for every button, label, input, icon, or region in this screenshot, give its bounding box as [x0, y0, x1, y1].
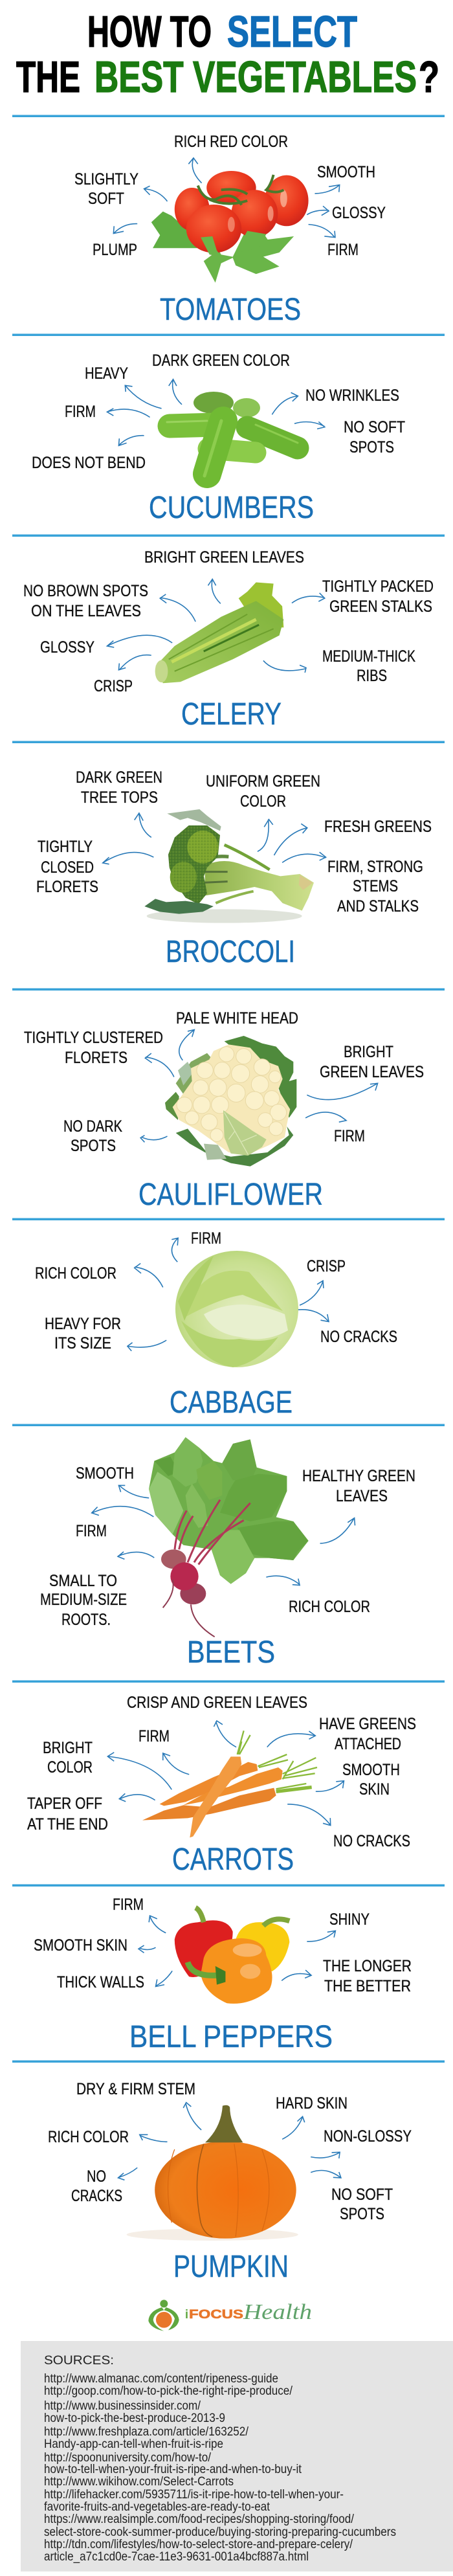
source list: http://www.wikihow.com/Select-Carrots	[44, 2475, 234, 2489]
panel: celery	[23, 548, 434, 732]
source list: favorite-fruits-and-vegetables-are-ready-to-eat	[44, 2500, 271, 2514]
label: HEALTHY GREEN	[302, 1467, 415, 1485]
arrow	[156, 1971, 172, 1986]
label: BRIGHT	[344, 1043, 393, 1061]
source list: http://www.businessinsider.com/	[44, 2399, 201, 2413]
heading: tomatoes: TOMATOES	[160, 293, 301, 327]
logo: iFocus Health: Health	[243, 2300, 312, 2324]
arrow	[292, 593, 325, 603]
arrow	[274, 823, 307, 855]
arrow	[125, 385, 162, 409]
arrow	[307, 1931, 335, 1942]
arrow	[103, 853, 153, 864]
arrow	[179, 1029, 194, 1060]
arrow	[287, 1804, 331, 1826]
illustration: cabbage	[175, 1251, 298, 1367]
arrow	[188, 158, 202, 183]
heading: carrots: CARROTS	[172, 1842, 294, 1877]
arrow	[140, 2134, 168, 2142]
label: GREEN LEAVES	[320, 1063, 424, 1081]
arrow	[92, 1506, 153, 1517]
arrow	[127, 1340, 166, 1351]
illustration: celery	[155, 583, 283, 683]
source list: http://www.almanac.com/content/ripeness-guide	[44, 2372, 278, 2386]
label: FIRM	[138, 1727, 170, 1745]
arrow	[315, 185, 340, 194]
label: SMOOTH	[76, 1464, 134, 1483]
label: DARK GREEN COLOR	[152, 352, 290, 370]
source list: select-store-cook-summer-produce/buying-storing-preparing-cucumbers	[44, 2526, 396, 2539]
arrow	[107, 635, 172, 647]
arrow	[311, 2152, 340, 2158]
heading: celery: CELERY	[181, 697, 282, 732]
source list: http://lifehacker.com/5935711/is-it-ripe-how-to-tell-when-your-	[44, 2488, 344, 2502]
label: CRACKS	[71, 2187, 122, 2205]
panel: tomatoes	[74, 133, 386, 327]
arrow	[135, 813, 151, 837]
label: CRISP	[94, 677, 133, 695]
panel: carrots	[27, 1694, 416, 1877]
label: TREE TOPS	[81, 789, 158, 807]
label: SKIN	[359, 1780, 390, 1798]
panel: cucumbers	[32, 352, 405, 525]
heading: beets: BEETS	[187, 1635, 275, 1670]
label: FIRM, STRONG	[327, 858, 423, 876]
illustration: beets	[149, 1437, 309, 1637]
arrow	[144, 186, 168, 201]
label: THE BETTER	[324, 1977, 411, 1995]
label: GREEN STALKS	[329, 598, 432, 616]
label: NO CRACKS	[333, 1832, 410, 1850]
label: DOES NOT BEND	[32, 454, 146, 472]
label: PLUMP	[93, 241, 137, 259]
label: HAVE GREENS	[319, 1715, 416, 1733]
logo: iFocus Health	[148, 2300, 312, 2331]
label: COLOR	[47, 1758, 93, 1776]
label: RICH COLOR	[48, 2128, 129, 2146]
arrow	[145, 1053, 174, 1077]
title: ?	[419, 52, 439, 102]
panel: beets	[40, 1437, 415, 1670]
source list: article_a7c1cd0e-7cae-11e3-9631-001a4bcf887a.html	[44, 2550, 309, 2564]
label: FIRM	[191, 1229, 221, 1248]
label: MEDIUM-SIZE	[40, 1591, 127, 1609]
arrow	[183, 2103, 201, 2130]
label: CRISP AND GREEN LEAVES	[127, 1694, 307, 1712]
source list: https://www.realsimple.com/food-recipes/shopping-storing/food/	[44, 2513, 355, 2526]
arrow	[118, 436, 144, 445]
panel: cauliflower	[24, 1009, 424, 1212]
arrow	[169, 379, 182, 405]
arrow	[294, 421, 325, 429]
source list: http://spoonuniversity.com/how-to/	[44, 2451, 212, 2465]
label: GLOSSY	[40, 638, 94, 656]
icon: logo figure	[148, 2300, 179, 2331]
label: HEAVY FOR	[45, 1315, 121, 1333]
logo: iFocus Health: i	[185, 2308, 188, 2322]
title: SELECT	[227, 7, 357, 56]
label: ITS SIZE	[54, 1334, 111, 1352]
arrow	[300, 1281, 324, 1305]
label: HARD SKIN	[276, 2094, 348, 2112]
source list: how-to-tell-when-your-fruit-is-ripe-and-when-to-buy-it	[44, 2463, 302, 2476]
arrow	[149, 1916, 166, 1933]
arrow	[160, 594, 195, 622]
label: THE LONGER	[323, 1957, 412, 1975]
label: TIGHTLY CLUSTERED	[24, 1029, 163, 1047]
source list: http://goop.com/how-to-pick-the-right-ripe-produce/	[44, 2384, 293, 2398]
arrow	[263, 660, 306, 673]
panel: sources	[21, 2341, 453, 2571]
arrow	[282, 2116, 305, 2139]
heading: sources: SOURCES:	[44, 2354, 114, 2368]
arrow	[307, 206, 329, 216]
heading: broccoli: BROCCOLI	[166, 935, 295, 969]
arrow	[171, 1238, 178, 1262]
label: FIRM	[334, 1127, 365, 1145]
arrow	[140, 1136, 168, 1142]
illustration: broccoli	[144, 809, 314, 923]
label: AT THE END	[27, 1815, 108, 1833]
label: TAPER OFF	[27, 1795, 102, 1813]
label: UNIFORM GREEN	[206, 772, 320, 790]
title	[16, 7, 439, 102]
label: SMALL TO	[49, 1572, 117, 1590]
arrow	[298, 1310, 329, 1322]
arrow	[118, 2167, 137, 2180]
label: DARK GREEN	[76, 768, 162, 787]
arrow	[107, 1753, 171, 1789]
arrow	[163, 1753, 189, 1775]
arrow	[214, 1721, 236, 1747]
label: FRESH GREENS	[324, 818, 432, 836]
label: PALE WHITE HEAD	[176, 1009, 298, 1027]
panel: broccoli	[36, 768, 432, 969]
label: SMOOTH	[342, 1761, 400, 1779]
arrow	[118, 655, 151, 670]
arrow	[272, 392, 298, 414]
label: ATTACHED	[335, 1735, 401, 1753]
label: NO CRACKS	[320, 1328, 397, 1346]
label: ON THE LEAVES	[31, 602, 141, 620]
title: HOW TO	[87, 7, 212, 56]
arrow	[107, 409, 150, 417]
arrow	[307, 1083, 378, 1100]
panel: pumpkin	[48, 2080, 412, 2284]
arrow	[320, 1518, 355, 1543]
label: SMOOTH SKIN	[34, 1936, 127, 1954]
source list	[44, 2372, 396, 2564]
label: FLORETS	[36, 878, 98, 896]
illustration: cucumbers	[167, 392, 298, 476]
arrow	[138, 1945, 156, 1953]
label: RICH COLOR	[289, 1598, 370, 1616]
illustration: carrots	[142, 1730, 317, 1837]
label: RICH RED COLOR	[174, 133, 288, 151]
logo: iFocus Health: FOCUS	[189, 2308, 243, 2322]
arrow	[316, 1781, 344, 1791]
arrow	[266, 1576, 300, 1585]
panel: bell peppers	[34, 1896, 412, 2054]
source list: how-to-pick-the-best-produce-2013-9	[44, 2412, 225, 2425]
label: NO SOFT	[344, 418, 405, 436]
label: ROOTS.	[61, 1611, 111, 1629]
label: COLOR	[240, 792, 286, 811]
label: SOFT	[88, 190, 124, 208]
title: THE	[16, 52, 80, 102]
label: NON-GLOSSY	[324, 2127, 412, 2145]
arrow	[282, 852, 326, 862]
label: TIGHTLY	[38, 838, 93, 856]
heading: cauliflower: CAULIFLOWER	[138, 1178, 323, 1212]
source list: http://tdn.com/lifestyles/how-to-select-store-and-prepare-celery/	[44, 2538, 353, 2551]
label: NO BROWN SPOTS	[23, 582, 148, 600]
arrow	[305, 1112, 346, 1122]
label: SPOTS	[349, 438, 394, 456]
label: SHINY	[329, 1910, 370, 1929]
illustration: pumpkin	[127, 2105, 298, 2241]
arrow	[309, 225, 335, 238]
label: FLORETS	[65, 1049, 127, 1067]
label: BRIGHT GREEN LEAVES	[144, 548, 304, 566]
label: NO SOFT	[331, 2186, 393, 2204]
heading: pumpkin: PUMPKIN	[173, 2250, 289, 2284]
arrow	[282, 1970, 311, 1980]
arrow	[113, 224, 137, 234]
arrow	[118, 1552, 154, 1559]
source list: Handy-app-can-tell-when-fruit-is-ripe	[44, 2437, 223, 2451]
label: FIRM	[76, 1522, 107, 1540]
label: BRIGHT	[43, 1739, 93, 1757]
label: THICK WALLS	[57, 1973, 144, 1991]
label: SPOTS	[71, 1137, 116, 1155]
illustration: cauliflower	[165, 1036, 296, 1167]
label: FIRM	[327, 241, 359, 259]
label: SMOOTH	[317, 163, 375, 181]
label: FIRM	[113, 1896, 144, 1914]
label: NO DARK	[63, 1117, 122, 1136]
label: SLIGHTLY	[74, 170, 138, 188]
label: CRISP	[307, 1257, 346, 1275]
label: GLOSSY	[332, 204, 386, 222]
illustration: bell peppers	[175, 1908, 289, 2004]
heading: cabbage: CABBAGE	[170, 1385, 293, 1420]
label: AND STALKS	[337, 897, 419, 915]
label: RICH COLOR	[35, 1264, 116, 1282]
arrow	[135, 1264, 163, 1287]
arrow	[258, 820, 273, 851]
arrow	[267, 1731, 315, 1747]
label: RIBS	[357, 667, 387, 685]
label: LEAVES	[336, 1487, 388, 1505]
label: NO	[87, 2167, 106, 2186]
arrow	[119, 1793, 155, 1802]
label: FIRM	[65, 403, 96, 421]
label: NO WRINKLES	[305, 386, 399, 405]
arrow	[118, 1485, 149, 1498]
arrow	[208, 579, 221, 603]
label: DRY & FIRM STEM	[76, 2080, 195, 2098]
panel: cabbage	[35, 1229, 397, 1420]
heading: cucumbers: CUCUMBERS	[149, 491, 314, 525]
label: STEMS	[353, 877, 398, 895]
label: HEAVY	[85, 364, 128, 383]
label: CLOSED	[41, 858, 94, 877]
illustration: tomatoes	[151, 171, 309, 283]
heading: bell peppers: BELL PEPPERS	[129, 2020, 333, 2054]
label: MEDIUM-THICK	[322, 647, 415, 666]
source list: http://www.freshplaza.com/article/163252/	[44, 2425, 249, 2439]
label: SPOTS	[340, 2205, 384, 2223]
arrow	[311, 2170, 341, 2178]
